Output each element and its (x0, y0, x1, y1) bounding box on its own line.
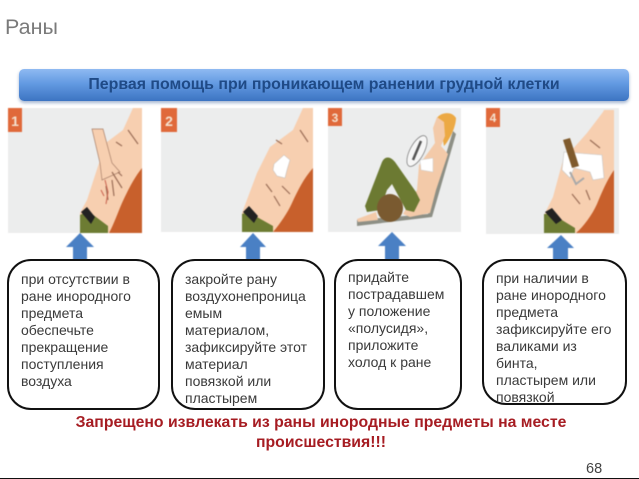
text box 3 (334, 259, 462, 410)
text box 4: повязкой (496, 389, 555, 405)
text box 2: материал (185, 356, 248, 372)
badge 3: 3 (332, 111, 339, 125)
text box 1: обеспечьте (21, 322, 94, 338)
text box 1: при отсутствии в (21, 271, 130, 287)
text box 3: пострадавшем (348, 286, 444, 302)
page number: 68 (586, 461, 602, 477)
text box 1 (7, 259, 160, 410)
text box 4 (482, 259, 627, 405)
text box 1: предмета (21, 305, 83, 321)
text box 4: валиками из (496, 338, 577, 354)
badge 2: 2 (165, 113, 173, 129)
title: Раны (5, 15, 58, 39)
text box 2: повязкой или (185, 373, 271, 389)
heading banner: Первая помощь при проникающем ранении грудной клетки (88, 76, 560, 93)
text box 1: ране инородного (21, 288, 131, 304)
arrow 1 (66, 233, 94, 260)
badge 2 (161, 108, 177, 132)
panel 1: hand covering chest wound (8, 108, 142, 233)
text box 4: при наличии в (496, 270, 589, 286)
text box 2: закройте рану (185, 271, 277, 287)
text box 2: воздухонепроница (185, 288, 306, 304)
text box 2: пластырем (185, 390, 257, 406)
text box 2: зафиксируйте этот (185, 339, 307, 355)
text box 2: материалом, (185, 322, 269, 338)
text box 4: бинта, (496, 355, 538, 371)
text box 1: поступления (21, 356, 104, 372)
text box 1: прекращение (21, 339, 108, 355)
text box 3: холод к ране (348, 354, 431, 370)
text box 4: пластырем или (496, 372, 596, 388)
panel 3: semi-sitting casualty (328, 108, 461, 232)
text box 4: зафиксируйте его (496, 321, 611, 337)
badge 4: 4 (490, 111, 497, 125)
warning text: происшествия!!! (256, 434, 386, 451)
warning text (76, 414, 566, 451)
text box 2 (171, 259, 325, 410)
text box 3: «полусидя», (348, 320, 428, 336)
text box 3: приложите (348, 337, 418, 353)
text box 3: у положение (348, 303, 430, 319)
text box 2: емым (185, 305, 222, 321)
text box 4: предмета (496, 304, 558, 320)
arrow 2 (240, 233, 266, 260)
text box 1: воздуха (21, 373, 72, 389)
badge 1: 1 (11, 113, 19, 129)
heading banner (19, 69, 629, 101)
panel 2: sealed wound (161, 108, 313, 232)
warning text: Запрещено извлекать из раны инородные предметы на месте (76, 414, 566, 431)
panel 4: fixed foreign object (486, 108, 619, 234)
text box 3: придайте (348, 269, 409, 285)
arrow 4 (547, 235, 574, 260)
arrow 3 (378, 232, 406, 260)
text box 4: ране инородного (496, 287, 606, 303)
